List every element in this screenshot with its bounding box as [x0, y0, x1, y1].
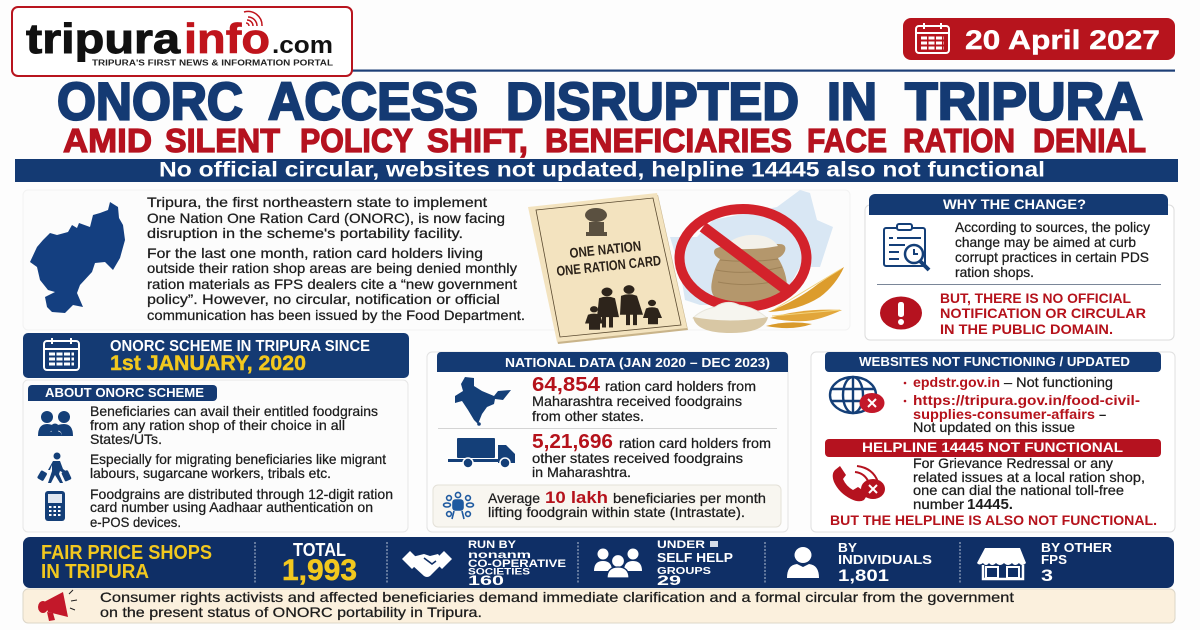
map: Tripura [30, 202, 125, 313]
icon: truck [448, 438, 515, 468]
illustration: ration card [528, 193, 688, 344]
subtitle [63, 122, 1146, 159]
header [869, 194, 1168, 215]
warning text [940, 290, 1146, 337]
subheading band: No official circular, websites not updated, helpline 14445 also not functional [159, 158, 1045, 182]
stat: self help groups: 29 [657, 572, 681, 588]
map backdrop [670, 190, 833, 305]
stat: co-operative societies: nonanm [468, 550, 531, 561]
icon: store [977, 548, 1026, 579]
stat: self help groups [657, 539, 733, 588]
website list: supplies-consumer-affairs [913, 407, 1095, 422]
header: websites [825, 352, 1161, 372]
stat: 5,21,696: ration card holders from [619, 436, 771, 451]
rule under header [350, 70, 1175, 72]
stat: self help groups: GROUPS [657, 565, 711, 577]
banner: scheme since: ONORC SCHEME IN TRIPURA SINCE [110, 338, 370, 355]
intro text: Tripura, the first northeastern state to implement [147, 195, 487, 210]
website list: https://tripura.gov.in/food-civil- [913, 393, 1140, 408]
heading: IN TRIPURA [41, 561, 149, 583]
callout: intrastate [433, 485, 781, 527]
helpline text [913, 456, 1145, 513]
icon: POS device [45, 491, 65, 521]
stat: co-operative societies: CO-OPERATIVE [468, 558, 566, 570]
title: DISRUPTED [506, 72, 799, 132]
subtitle: DENIAL [1033, 122, 1146, 159]
panel: fair price shops [23, 537, 1174, 588]
header: helpline [825, 439, 1161, 457]
warning line: BUT THE HELPLINE IS ALSO NOT FUNCTIONAL. [830, 513, 1157, 528]
website list [904, 375, 1140, 435]
about text: Foodgrains are distributed through 12-digit ration [90, 487, 393, 502]
warning text: IN THE PUBLIC DOMAIN. [940, 321, 1113, 337]
icon: globe [830, 377, 884, 413]
stat: 64,854: Maharashtra received foodgrains [532, 394, 742, 409]
icon: phone [833, 466, 885, 501]
icon: exclamation [880, 296, 922, 330]
subtitle: BENEFICIARIES [545, 122, 792, 159]
stat: 64,854: from other states. [532, 409, 644, 424]
logo: tripurainfo.com: tripura [26, 15, 181, 62]
subtitle: AMID [63, 122, 152, 159]
callout: intrastate: beneficiaries per month [613, 491, 766, 506]
stat: 5,21,696: 5,21,696 [532, 431, 613, 453]
logo: tripurainfo.com: .com [272, 32, 333, 59]
stat: other FPS: 3 [1041, 566, 1053, 585]
icon: clipboard magnifier [884, 224, 929, 270]
intro text: disruption in the scheme's portability facility. [147, 226, 463, 241]
website list: – Not functioning [1004, 375, 1113, 390]
icon: handshake [402, 551, 452, 577]
intro text: communication has been issued by the Food Department. [147, 308, 525, 323]
intro text: policy”. However, no circular, notification or official [147, 292, 500, 307]
about text [90, 404, 393, 530]
stat: 5,21,696 [532, 431, 771, 480]
intro text: One Nation One Ration Card (ONORC), is now facing [147, 211, 505, 226]
header: websites: WEBSITES NOT FUNCTIONING / UPDATED [859, 354, 1130, 369]
about text: Especially for migrating beneficiaries like migrant [90, 452, 386, 467]
subtitle: POLICY [300, 122, 413, 159]
callout: demand: on the present status of ONORC portability in Tripura. [100, 605, 482, 620]
icon: traveller [37, 452, 72, 483]
why text: According to sources, the policy [955, 220, 1150, 235]
subtitle: SILENT [165, 122, 280, 159]
date badge: 20 April 2027 [965, 25, 1160, 55]
title: ACCESS [268, 72, 478, 132]
stat: 64,854: ration card holders from [605, 379, 756, 394]
heading [41, 542, 212, 583]
stat: co-operative societies: RUN BY [468, 539, 517, 551]
stat: co-operative societies [468, 539, 566, 588]
stat: co-operative societies: SOCIETIES [468, 566, 530, 578]
icon: group [594, 548, 642, 578]
stat: individuals [838, 540, 932, 585]
logo: tripurainfo.com: TRIPURA'S FIRST NEWS & INFORMATION PORTAL [92, 58, 333, 68]
icon: people [38, 411, 73, 436]
title: ONORC [57, 72, 243, 132]
about text: Beneficiaries can avail their entitled foodgrains [90, 404, 378, 419]
intro text: For the last one month, ration card holders living [147, 246, 483, 261]
stat: individuals: BY [838, 540, 857, 555]
about text: States/UTs. [90, 432, 162, 447]
helpline text: related issues at a local ration shop, [913, 470, 1145, 485]
stat: other FPS: FPS [1041, 552, 1067, 567]
helpline text: number [913, 497, 964, 512]
intro text [147, 195, 525, 323]
panel: introduction [23, 190, 850, 344]
stat: total: 1,993 [282, 554, 357, 587]
stat: self help groups: UNDER [657, 539, 705, 551]
why text: change may be aimed at curb [955, 235, 1136, 250]
about text: card number using Aadhaar authentication on [90, 500, 373, 515]
subtitle: RATION [903, 122, 1015, 159]
icon: beneficiaries [444, 492, 474, 519]
icon: calendar [44, 338, 79, 370]
header: WHY THE CHANGE? [943, 196, 1086, 212]
icon: calendar [916, 23, 949, 53]
icon: person [787, 547, 819, 578]
logo: tripurainfo.com [12, 7, 352, 76]
subtitle: FACE [807, 122, 887, 159]
banner: scheme since: 1st JANUARY, 2020 [110, 352, 306, 375]
logo: tripurainfo.com: info [184, 15, 270, 62]
header: helpline: HELPLINE 14445 NOT FUNCTIONAL [862, 440, 1123, 455]
map: India [455, 377, 511, 426]
icon: megaphone [38, 590, 77, 621]
header: NATIONAL DATA (JAN 2020 – DEC 2023) [505, 355, 770, 370]
date badge [903, 18, 1175, 60]
warning text: NOTIFICATION OR CIRCULAR [940, 305, 1146, 321]
panel: websites and helpline [811, 352, 1175, 532]
heading: ABOUT ONORC SCHEME [45, 385, 204, 400]
icon: prohibition sign [680, 209, 806, 307]
illustration: wheat [766, 267, 844, 328]
intro text: outside their ration shop areas are being denied monthly [147, 261, 517, 276]
title [57, 72, 1143, 132]
website list: – [1099, 407, 1106, 422]
illustration: rice sack [711, 235, 787, 304]
stat: other FPS [1041, 540, 1113, 585]
subtitle: SHIFT, [427, 122, 528, 159]
stat: 64,854 [532, 374, 756, 424]
callout: intrastate: lifting foodgrain within state (Intrastate). [488, 505, 745, 520]
stat: total: TOTAL [293, 540, 346, 560]
panel: why the change [865, 194, 1174, 340]
why text [955, 220, 1150, 280]
stat: individuals: INDIVIDUALS [838, 552, 932, 567]
callout: demand [23, 589, 1175, 623]
about text: from any ration shop of their choice in all [90, 418, 345, 433]
panel: national data [427, 352, 788, 532]
stat: self help groups: SELF HELP [657, 551, 733, 565]
why text: ration shops. [955, 265, 1034, 280]
panel: about ONORC [23, 380, 408, 532]
illustration: rice bowl [693, 302, 768, 333]
banner: scheme since [23, 333, 409, 378]
helpline text: one can dial the national toll-free [913, 483, 1124, 498]
illustration: ration card: ONE RATION CARD [556, 252, 662, 279]
subheading band [15, 158, 1178, 182]
callout: demand: Consumer rights activists and affected beneficiaries demand immediate clarification and a formal circular from the government [100, 590, 1014, 605]
illustration: ration card: ONE NATION [569, 238, 642, 261]
title: TRIPURA [905, 72, 1143, 132]
stat: 64,854: 64,854 [532, 374, 601, 396]
title: IN [827, 72, 877, 132]
stat: other FPS: BY OTHER [1041, 540, 1113, 555]
website list: epdstr.gov.in [913, 375, 1000, 390]
stat: individuals: 1,801 [838, 566, 889, 585]
callout: intrastate: Average [488, 491, 540, 506]
stat: 5,21,696: in Maharashtra. [532, 465, 631, 480]
helpline text: For Grievance Redressal or any [913, 456, 1113, 471]
about text: labours, sugarcane workers, tribals etc. [90, 466, 331, 481]
why text: corrupt practices in certain PDS [955, 250, 1149, 265]
warning text: BUT, THERE IS NO OFFICIAL [940, 290, 1131, 306]
emblem [585, 208, 607, 236]
family [585, 285, 662, 330]
website list: Not updated on this issue [913, 420, 1075, 435]
stat: 5,21,696: other states received foodgrains [532, 451, 743, 466]
callout: intrastate: 10 lakh [545, 488, 608, 507]
header [437, 352, 788, 372]
intro text: ration materials as FPS dealers cite a “new government [147, 277, 517, 292]
helpline text: 14445. [967, 496, 1013, 513]
about text: e-POS devices. [90, 515, 181, 530]
heading: FAIR PRICE SHOPS [41, 542, 212, 564]
stat: co-operative societies: 160 [468, 572, 504, 588]
